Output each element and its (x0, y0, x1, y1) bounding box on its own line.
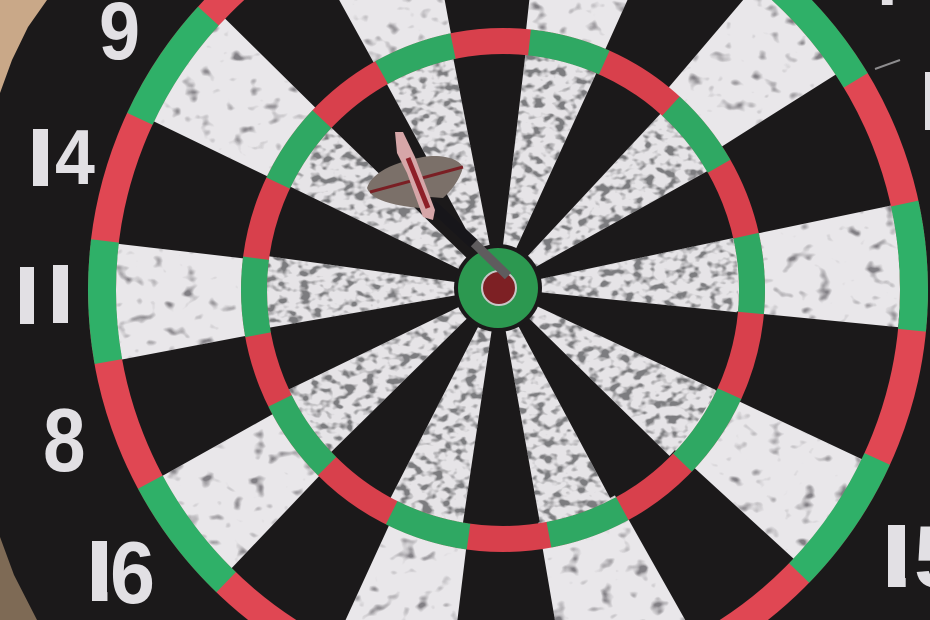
number 15 (888, 507, 930, 607)
number 15: 1 (888, 509, 907, 607)
tan wall bottom-left (0, 537, 37, 620)
dart shaft (432, 205, 474, 244)
inner white wedges (356, 146, 640, 430)
number 11 (20, 249, 69, 342)
bullseye (454, 244, 542, 332)
number 14: 4 (55, 113, 95, 201)
treble ring (206, 0, 800, 587)
tan wall top-left (0, 0, 47, 93)
flight red centre (408, 158, 428, 208)
dart barrel (474, 243, 508, 276)
wire fragment (875, 60, 900, 69)
number 16: 6 (110, 523, 155, 620)
number 8: 8 (43, 389, 86, 490)
dart flight wing (367, 156, 463, 208)
dart (367, 132, 508, 276)
number 13: 1 (925, 57, 930, 148)
flight stripe (370, 167, 463, 192)
number 14 (33, 112, 95, 203)
dart flight upright (395, 132, 435, 220)
number 11: 1 (53, 249, 69, 340)
number 11: 1 (20, 250, 35, 342)
number 16: 1 (92, 523, 108, 620)
number 14: 1 (33, 112, 49, 203)
